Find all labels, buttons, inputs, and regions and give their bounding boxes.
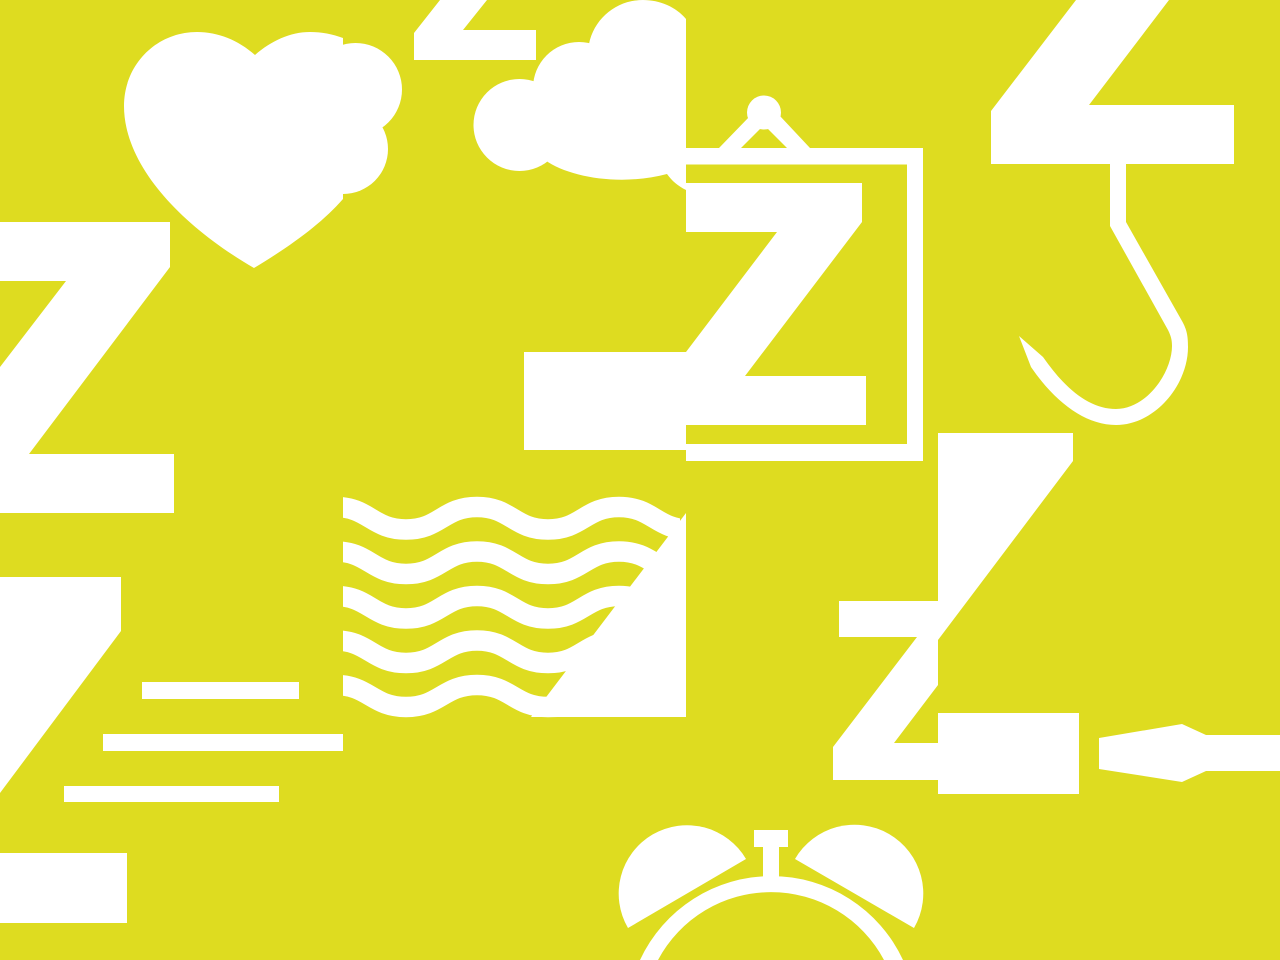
clock bell right xyxy=(795,825,923,928)
clock top button xyxy=(754,830,788,880)
letter Z: right xyxy=(833,433,1079,794)
letter Z: centre inside frame xyxy=(524,183,866,450)
icon: hanging picture frame xyxy=(686,96,923,461)
letter Z: large left xyxy=(0,222,174,513)
clock ring xyxy=(640,876,903,960)
icon: waves with triangle xyxy=(335,507,690,717)
icon: fish hook with letter Z xyxy=(991,0,1234,425)
icon: cloud xyxy=(474,0,686,190)
icon: heart with overlapping circles xyxy=(124,32,402,268)
letter Z: lower left with text lines xyxy=(0,577,343,923)
letter Z: top centre fragment xyxy=(414,0,536,60)
icon: alarm clock xyxy=(619,825,923,960)
icon: three horizontal lines xyxy=(64,682,343,802)
clock bell left xyxy=(619,825,746,928)
icon: pencil tip xyxy=(1099,724,1280,782)
